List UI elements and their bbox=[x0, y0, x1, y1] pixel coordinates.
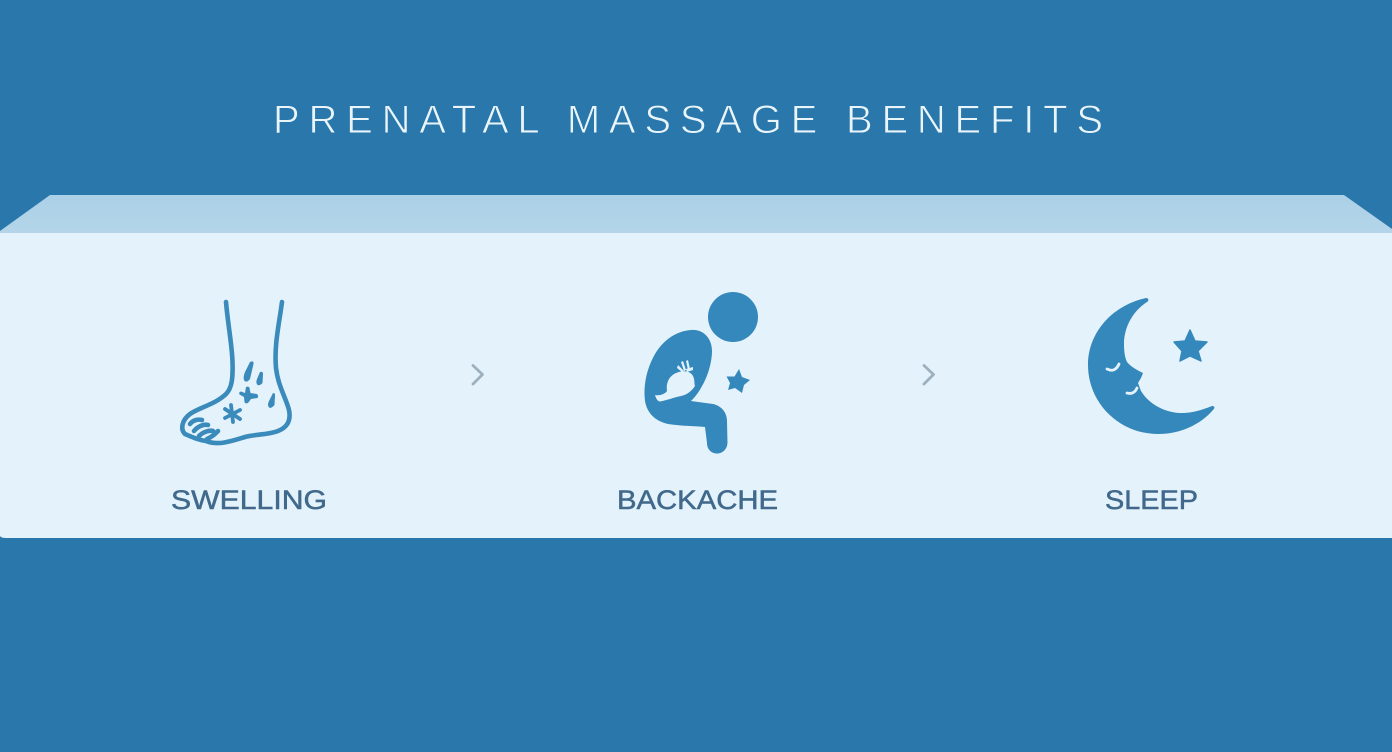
arrow: swelling to backache bbox=[473, 366, 482, 384]
item: sleep bbox=[1088, 298, 1214, 515]
item: backache bbox=[617, 292, 778, 515]
body bbox=[644, 330, 728, 454]
label: swelling: SWELLING bbox=[171, 485, 327, 515]
icon: seated figure bbox=[644, 292, 758, 454]
icon: crescent moon bbox=[1088, 298, 1214, 434]
pain star bbox=[726, 369, 750, 393]
head bbox=[708, 292, 758, 342]
panel top bevel bbox=[0, 195, 1392, 233]
title: PRENATAL MASSAGE BENEFITS bbox=[273, 98, 1103, 142]
moon eye left bbox=[1107, 364, 1119, 370]
label: backache: BACKACHE bbox=[617, 485, 778, 515]
icon: swollen foot bbox=[182, 302, 290, 443]
star bbox=[1174, 330, 1207, 361]
item: swelling bbox=[171, 302, 327, 515]
label: sleep: SLEEP bbox=[1105, 485, 1198, 515]
moon eye right bbox=[1127, 388, 1137, 393]
panel: benefits card bbox=[0, 195, 1392, 538]
panel front face bbox=[0, 233, 1392, 538]
back pain mark bbox=[655, 360, 695, 402]
icon: swelling marks bbox=[239, 361, 275, 408]
arrow: backache to sleep bbox=[924, 366, 934, 384]
